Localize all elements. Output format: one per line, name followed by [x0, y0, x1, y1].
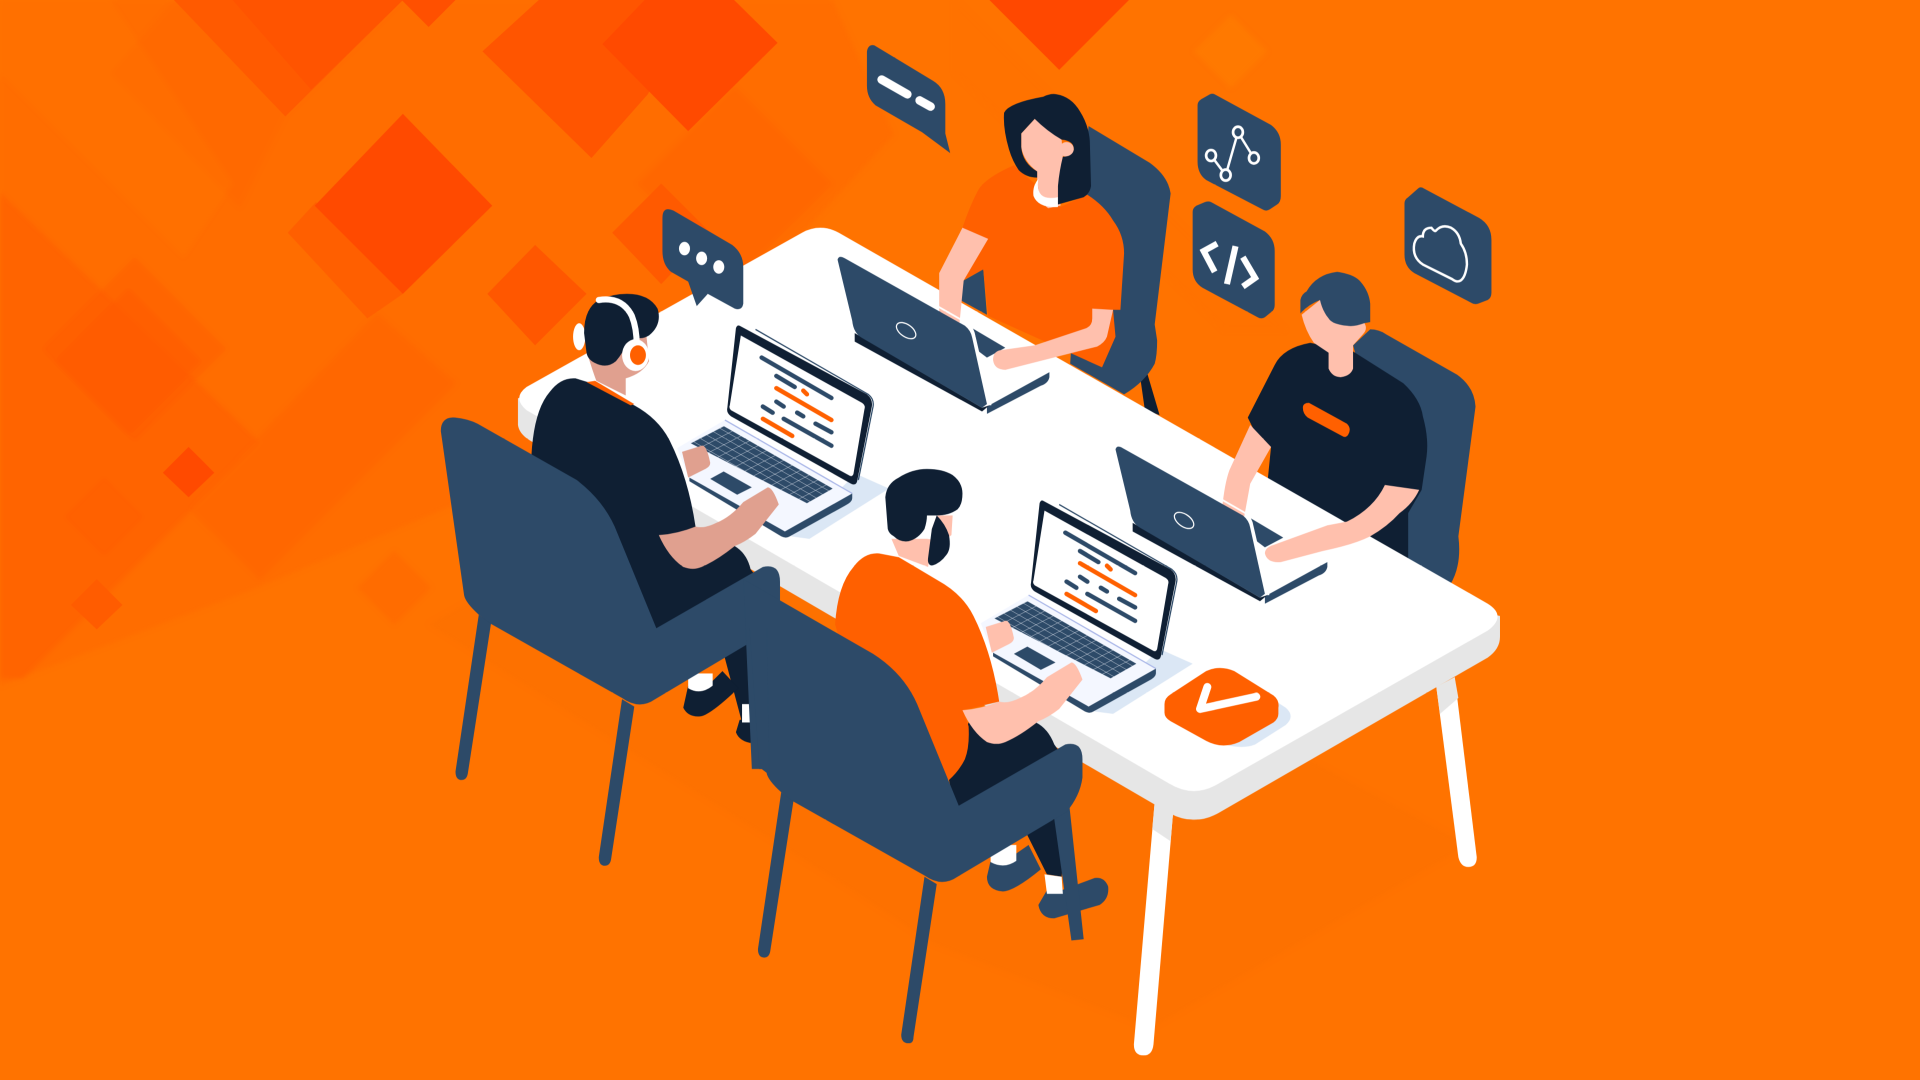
bars — [882, 80, 931, 107]
chair gap — [960, 269, 987, 315]
ear — [1059, 142, 1074, 157]
headset cup — [622, 339, 649, 371]
laptop: front right — [981, 501, 1193, 714]
arm — [962, 662, 1082, 744]
torso — [531, 378, 765, 649]
hair — [885, 469, 962, 541]
second shoe — [736, 716, 762, 743]
collar — [587, 381, 634, 405]
base — [967, 328, 1049, 413]
neck and face — [1021, 119, 1063, 208]
hair — [1004, 94, 1091, 204]
hinge line — [725, 420, 852, 493]
code lines — [1065, 533, 1135, 621]
badge shadow — [1224, 692, 1291, 747]
chair: man at back — [1353, 329, 1476, 585]
cloud outline — [1414, 226, 1467, 281]
table — [518, 228, 1500, 1056]
table side — [518, 398, 1500, 820]
pants — [949, 722, 1069, 827]
code lines — [762, 358, 831, 446]
lid shadow — [855, 333, 989, 411]
laptop: front left — [677, 325, 889, 539]
hair — [584, 294, 659, 366]
headset ear — [573, 323, 585, 350]
lid edge — [1125, 444, 1269, 595]
beard — [928, 516, 950, 566]
lid — [1116, 447, 1265, 598]
neck and face — [1302, 300, 1366, 377]
headset band — [599, 299, 637, 345]
shoe left — [987, 845, 1041, 891]
chair: front right — [743, 579, 1084, 1043]
shadow — [1095, 649, 1193, 714]
trackpad — [710, 471, 752, 495]
keyboard edge — [972, 328, 1005, 358]
third chair leg: front left — [749, 628, 769, 769]
badge body — [1164, 668, 1279, 745]
legs — [1026, 784, 1069, 877]
laptop: back left — [838, 255, 1049, 414]
base — [981, 595, 1156, 711]
shadow — [791, 474, 889, 539]
icon: graph — [1198, 94, 1281, 211]
arm: man at back right — [1265, 485, 1419, 562]
laptop: back right — [1116, 444, 1327, 604]
shoe right — [1038, 878, 1108, 918]
base — [677, 420, 852, 536]
speech bubble: bars — [867, 45, 950, 153]
dots — [679, 242, 690, 255]
person: front left — [531, 294, 779, 759]
neck — [588, 337, 649, 396]
shoe — [683, 671, 738, 716]
keyboard edge — [1250, 518, 1283, 547]
arm: man at back left — [1222, 425, 1271, 524]
person: front right — [835, 469, 1108, 918]
badge on shirt — [1303, 403, 1350, 437]
check badge — [1164, 668, 1291, 747]
collar — [1033, 179, 1058, 207]
sock left — [991, 845, 1016, 865]
icon: code — [1193, 201, 1275, 318]
keyboard — [691, 426, 833, 503]
left hand — [682, 446, 710, 478]
torso — [1248, 343, 1427, 563]
icon: cloud — [1404, 187, 1491, 304]
hair — [1300, 272, 1370, 326]
table top — [519, 228, 1498, 791]
arm: woman right — [993, 309, 1113, 370]
lid — [838, 257, 987, 408]
person: man at back — [1248, 272, 1427, 563]
screen — [1031, 501, 1176, 660]
trackpad — [1014, 647, 1056, 670]
sock right — [1044, 874, 1063, 894]
table legs — [1134, 802, 1173, 1056]
arm: woman left — [939, 228, 988, 331]
graph lines — [1211, 132, 1254, 175]
code glyph — [1204, 244, 1255, 287]
speech bubble: dots — [662, 209, 743, 309]
lid edge — [847, 255, 991, 405]
logo — [894, 319, 919, 342]
left hand — [986, 621, 1014, 653]
neck and face — [891, 516, 953, 567]
torso — [835, 553, 999, 780]
arm — [659, 487, 779, 569]
base — [1245, 518, 1327, 602]
chair: woman at back — [1070, 126, 1171, 415]
keyboard — [994, 601, 1136, 678]
lid shadow — [1133, 523, 1267, 601]
screen — [727, 325, 872, 484]
logo — [1172, 509, 1197, 532]
graph nodes — [1206, 127, 1259, 181]
accent diamonds — [71, 0, 1129, 629]
person: woman at back — [960, 94, 1124, 367]
legs — [722, 637, 765, 759]
hinge line — [1029, 595, 1156, 669]
check mark — [1200, 687, 1256, 709]
sock — [688, 673, 713, 691]
torso — [962, 165, 1124, 367]
chair: front left — [441, 417, 780, 866]
